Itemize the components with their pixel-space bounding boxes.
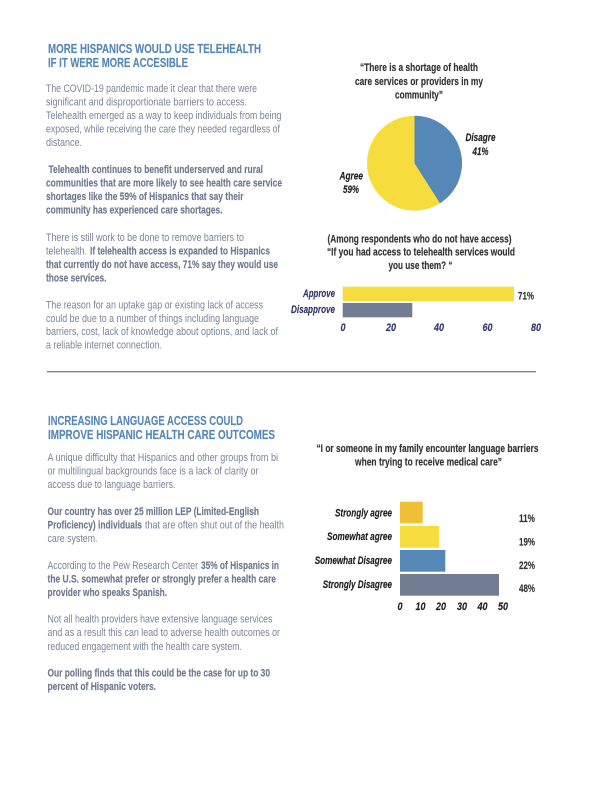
- chart title: language barriers: when trying to receive medical care”: [354, 456, 502, 468]
- axis labels: 10: [416, 601, 426, 613]
- panel: shortage pie chart: [339, 62, 496, 211]
- axis labels: 0: [398, 601, 403, 613]
- chart title: shortage: care services or providers in my: [355, 76, 484, 88]
- axis labels: 30: [457, 601, 468, 613]
- text block: language barriers: or multilingual backgrounds face is a lack of clarity or: [48, 466, 259, 478]
- pie label: disagree: Disagre: [466, 132, 496, 144]
- heading: telehealth: IF IT WERE MORE ACCESIBLE: [48, 56, 188, 70]
- axis labels: 20: [385, 322, 397, 334]
- text block: polling: Our polling finds that this could be the case for up to 30: [48, 668, 270, 680]
- pie chart: [367, 116, 462, 211]
- heading: telehealth: [48, 42, 261, 70]
- text block: pandemic barriers: significant and disproportionate barriers to access.: [46, 96, 247, 108]
- text block: Pew Research: According to the Pew Research Center: [48, 560, 198, 572]
- heading: language access: [48, 414, 275, 442]
- axis labels: [398, 601, 509, 613]
- text block: pandemic barriers: The COVID-19 pandemic made it clear that there were: [46, 83, 257, 95]
- bar: strongly disagree: Strongly Disagree: [323, 579, 392, 591]
- bar: strongly disagree: 48%: [519, 583, 535, 595]
- text block: expanded access: [46, 232, 278, 284]
- axis labels: 40: [477, 601, 488, 613]
- text block: uptake gap: a reliable internet connection.: [46, 340, 162, 352]
- pie label: agree: [339, 170, 363, 196]
- text block: LEP individuals: that are often shut out of the health: [145, 520, 284, 532]
- text block: polling: [48, 668, 270, 693]
- text block: underserved communities: [46, 164, 282, 216]
- axis labels: 60: [482, 322, 493, 334]
- text block: health outcomes: reduced engagement with the health care system.: [48, 641, 242, 653]
- pie label: disagree: [466, 132, 496, 158]
- bar: strongly disagree: [323, 574, 535, 596]
- bar: disapprove: Disapprove: [291, 304, 335, 316]
- axis labels: 50: [498, 601, 509, 613]
- text block: expanded access: those services.: [46, 272, 106, 284]
- bar: somewhat disagree: [315, 550, 535, 572]
- chart title: language barriers: [316, 443, 538, 468]
- bar: approve: Approve: [302, 288, 335, 300]
- chart title: shortage: [355, 62, 484, 102]
- chart title: telehealth use: “If you had access to telehealth services would: [327, 246, 515, 258]
- chart title: telehealth use: (Among respondents who do not have access): [328, 234, 512, 246]
- axis labels: 20: [435, 601, 447, 613]
- text block: language barriers: [48, 452, 278, 491]
- text block: uptake gap: [46, 300, 279, 352]
- axis labels: [340, 322, 542, 334]
- text block: LEP individuals: [48, 506, 284, 545]
- text block: pandemic barriers: exposed, while receiving the care they needed regardless of: [46, 124, 281, 136]
- axis labels: 40: [433, 322, 445, 334]
- pie label: agree: Agree: [339, 170, 363, 182]
- text block: LEP individuals: Proficiency) individuals: [48, 520, 142, 532]
- text block: language barriers: access due to language barriers.: [48, 479, 176, 491]
- bar: somewhat agree: 19%: [519, 536, 535, 548]
- text block: Pew Research: provider who speaks Spanish.: [48, 587, 167, 599]
- text block: LEP individuals: Our country has over 25 million LEP (Limited-English: [48, 506, 259, 518]
- bar: approve: [302, 287, 534, 302]
- text block: uptake gap: could be due to a number of things including language: [46, 313, 259, 325]
- text block: pandemic barriers: Telehealth emerged as a way to keep individuals from being: [46, 110, 282, 122]
- bar: strongly agree: Strongly agree: [335, 508, 392, 520]
- bar: somewhat disagree: 22%: [519, 560, 535, 572]
- text block: Pew Research: 35% of Hispanics in: [201, 560, 279, 572]
- axis labels: 0: [340, 322, 346, 334]
- panel: telehealth use bar chart: [291, 234, 542, 334]
- bar: somewhat agree: [327, 526, 535, 548]
- text block: underserved communities: Telehealth continues to benefit underserved and rural: [48, 164, 263, 176]
- heading: telehealth: MORE HISPANICS WOULD USE TELEHEALTH: [48, 42, 261, 56]
- panel: language barriers bar chart: [315, 443, 538, 613]
- text block: expanded access: There is still work to be done to remove barriers to: [46, 232, 244, 244]
- pie label: disagree: 41%: [472, 146, 489, 158]
- bar: disapprove: [291, 303, 412, 317]
- axis labels: 80: [531, 322, 542, 334]
- pie label: agree: 59%: [343, 184, 359, 196]
- text block: polling: percent of Hispanic voters.: [48, 681, 156, 693]
- text block: LEP individuals: care system.: [48, 533, 98, 545]
- text block: underserved communities: shortages like the 59% of Hispanics that say their: [46, 191, 244, 203]
- text block: Pew Research: [48, 560, 279, 599]
- chart title: language barriers: “I or someone in my family encounter language barriers: [316, 443, 538, 455]
- bar: somewhat agree: Somewhat agree: [327, 531, 392, 543]
- bar: somewhat disagree: Somewhat Disagree: [315, 555, 392, 567]
- text block: pandemic barriers: [46, 83, 282, 149]
- heading: language access: INCREASING LANGUAGE ACCESS COULD: [48, 414, 243, 428]
- text block: underserved communities: communities that are more likely to see health care service: [46, 178, 282, 190]
- text block: health outcomes: Not all health providers have extensive language services: [48, 614, 273, 626]
- text block: pandemic barriers: distance.: [46, 137, 82, 149]
- bar: strongly agree: [335, 502, 535, 525]
- text block: expanded access: telehealth.: [46, 246, 87, 258]
- bar: strongly agree: 11%: [519, 513, 535, 525]
- chart title: telehealth use: you use them? “: [388, 260, 452, 272]
- text block: language barriers: A unique difficulty that Hispanics and other groups from bi: [48, 452, 278, 464]
- chart title: telehealth use: [327, 234, 515, 272]
- text block: uptake gap: The reason for an uptake gap or existing lack of access: [46, 300, 263, 312]
- chart title: shortage: community”: [395, 90, 443, 102]
- panel: language access text column: [48, 414, 284, 693]
- text block: health outcomes: and as a result this can lead to adverse health outcomes or: [48, 627, 280, 639]
- text block: Pew Research: the U.S. somewhat prefer or strongly prefer a health care: [48, 574, 276, 586]
- text block: expanded access: If telehealth access is expanded to Hispanics: [90, 246, 270, 258]
- text block: health outcomes: [48, 614, 280, 653]
- heading: language access: IMPROVE HISPANIC HEALTH CARE OUTCOMES: [48, 428, 275, 442]
- text block: expanded access: that currently do not have access, 71% say they would use: [46, 259, 278, 271]
- chart title: shortage: “There is a shortage of health: [360, 62, 478, 74]
- bar: approve: 71%: [518, 290, 534, 302]
- text block: underserved communities: community has experienced care shortages.: [46, 204, 222, 216]
- text block: uptake gap: barriers, cost, lack of knowledge about options, and lack of: [46, 326, 279, 338]
- panel: telehealth text column: [46, 42, 282, 352]
